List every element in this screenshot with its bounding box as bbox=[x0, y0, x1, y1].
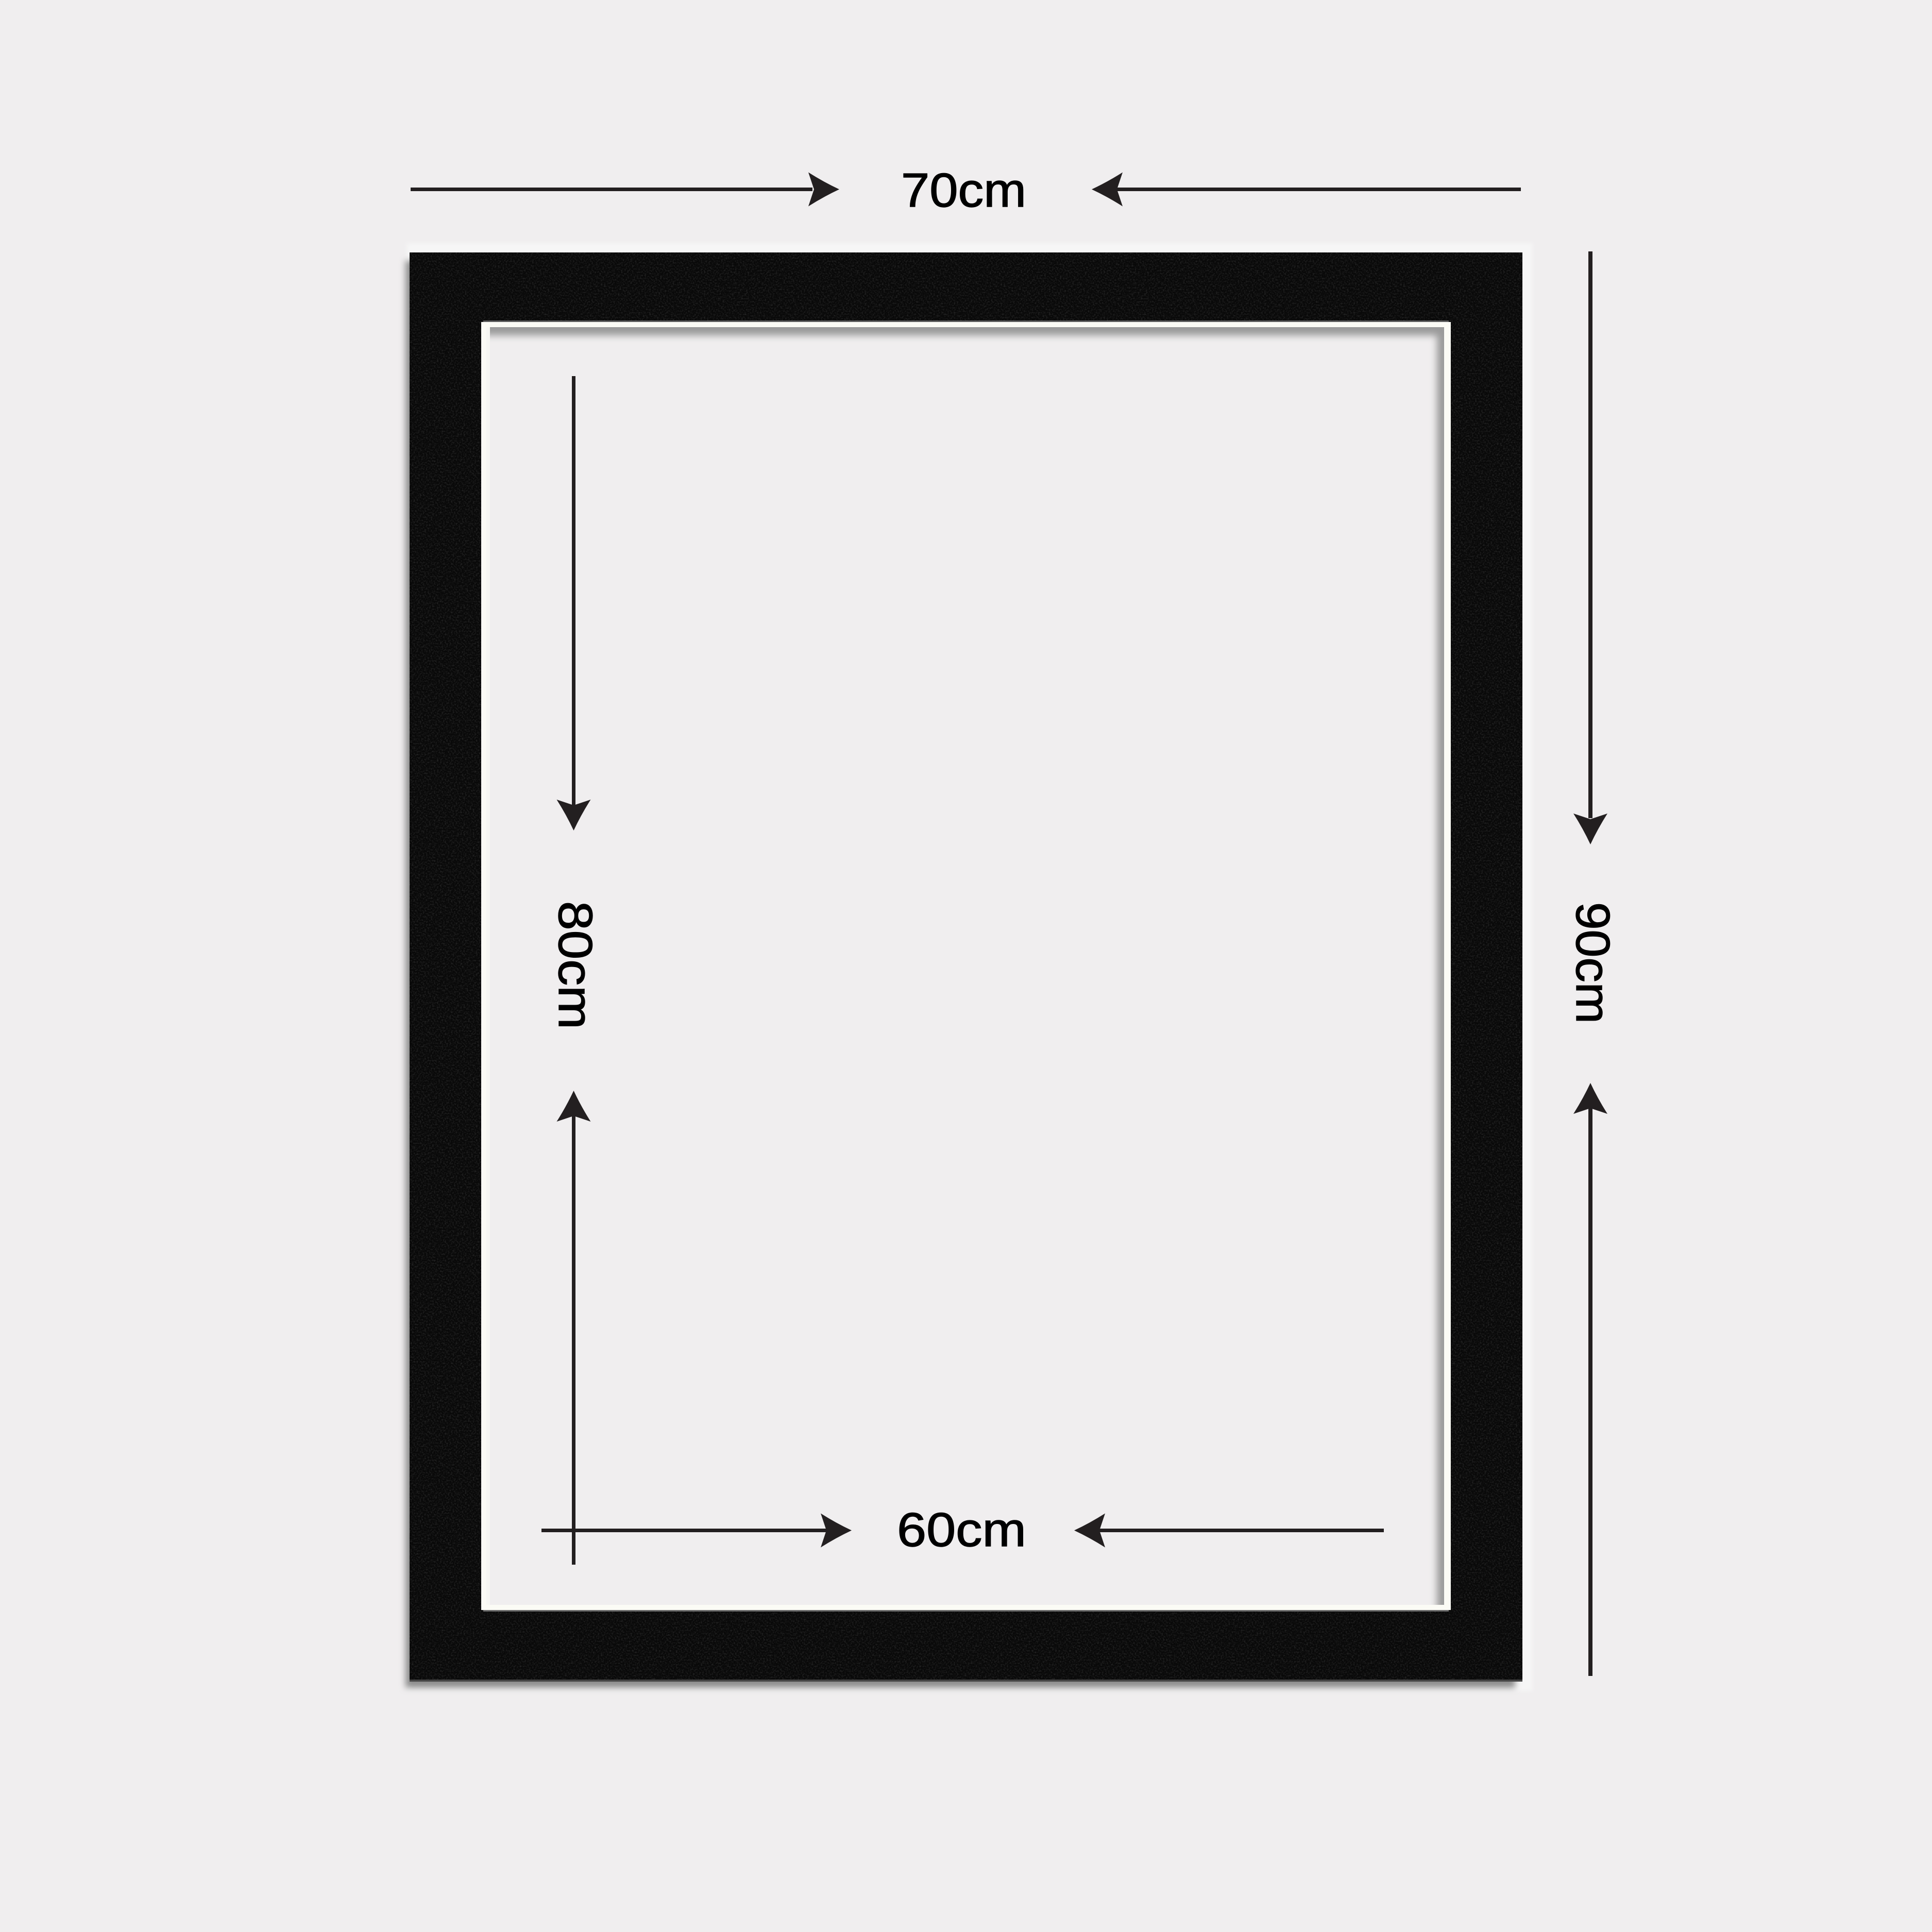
arrow: inner width left bbox=[541, 1514, 852, 1548]
arrow: right height down bbox=[1573, 251, 1607, 844]
frame drop shadow bbox=[405, 261, 1515, 1688]
arrow: inner width right bbox=[1074, 1514, 1384, 1548]
arrow: right height up bbox=[1573, 1083, 1607, 1676]
frame outer light halo bbox=[407, 243, 1532, 1691]
frame board texture bbox=[410, 252, 1522, 1680]
arrow: top width left bbox=[411, 172, 839, 206]
label: 80cm inner height: 80cm bbox=[549, 901, 602, 1029]
frame bottom edge highlight bbox=[410, 1680, 1522, 1682]
label: 70cm outer width: 70cm bbox=[901, 163, 1026, 217]
black frame board bbox=[410, 252, 1522, 1682]
arrow: top width right bbox=[1092, 172, 1521, 206]
opening inner shadow bbox=[490, 327, 1444, 1605]
picture frame bbox=[405, 243, 1532, 1691]
mat top bevel bbox=[483, 320, 1449, 322]
label: 60cm inner width: 60cm bbox=[897, 1503, 1026, 1556]
arrow: inner height up bbox=[556, 1091, 590, 1565]
white mat border bbox=[481, 322, 1451, 1610]
opening left edge fade bbox=[486, 327, 490, 1605]
mat bottom bevel bbox=[483, 1610, 1449, 1612]
frame opening bbox=[486, 327, 1444, 1605]
arrow: inner height down bbox=[556, 376, 590, 831]
label: 90cm outer height: 90cm bbox=[1566, 902, 1620, 1024]
